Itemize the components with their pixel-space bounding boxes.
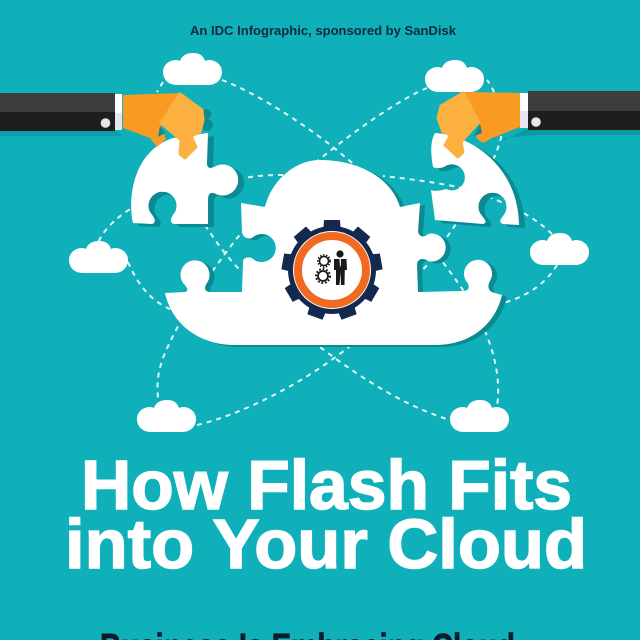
cloud: right: [530, 233, 589, 265]
cloud: bottom right: [450, 400, 509, 432]
right arm and hand: [438, 91, 640, 157]
button: [531, 117, 541, 127]
title: [65, 446, 587, 583]
cloud: top left: [163, 53, 222, 85]
sleeve: [528, 91, 640, 130]
sleeve: [0, 93, 115, 131]
cloud: top right: [425, 60, 484, 92]
cuff: [520, 93, 528, 128]
icon: small gears: [316, 255, 330, 283]
icon: businessman: [334, 250, 347, 285]
hand: [123, 93, 203, 158]
cloud: bottom left: [137, 400, 196, 432]
source line: An IDC Infographic, sponsored by SanDisk: [190, 24, 456, 38]
cloud: left: [69, 241, 128, 273]
icon: gear badge: [281, 220, 383, 320]
cuff: [115, 94, 122, 130]
puzzle piece: left: [131, 133, 244, 227]
title: How Flash Fits: [81, 446, 572, 524]
puzzle piece: right: [431, 133, 525, 228]
title: into Your Cloud: [65, 505, 587, 583]
button: [101, 118, 110, 128]
main cloud: [165, 160, 507, 347]
hand: [438, 92, 520, 157]
left arm and hand: [0, 93, 213, 158]
